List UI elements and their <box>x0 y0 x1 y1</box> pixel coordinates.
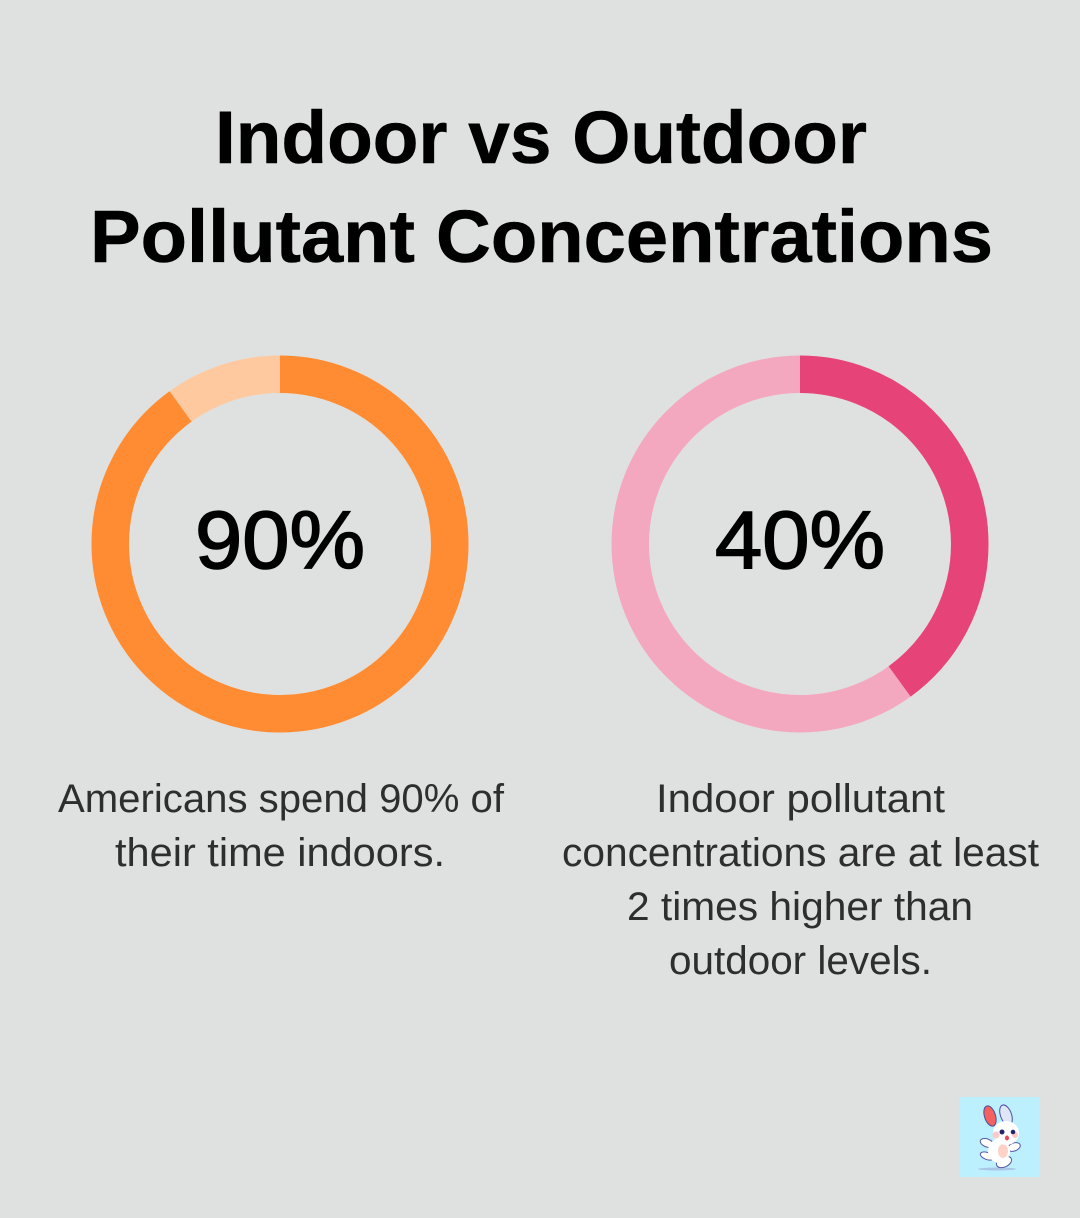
head <box>993 1121 1019 1145</box>
body <box>988 1139 1010 1163</box>
arms and legs <box>979 1137 1021 1170</box>
description: 40%: Indoor pollutant <box>656 777 945 821</box>
description: 90%: their time indoors. <box>115 831 445 875</box>
value: 90%: 90% <box>195 495 365 586</box>
title: Indoor vs Outdoor <box>215 96 867 179</box>
panel: 40% pollutant concentrations <box>562 374 1039 983</box>
donut chart: 90% <box>110 374 450 714</box>
icon: running rabbit logo <box>960 1097 1040 1177</box>
title: Pollutant Concentrations <box>90 195 993 278</box>
value: 40%: 40% <box>715 495 885 586</box>
description: 40% <box>562 777 1039 983</box>
description: 40%: concentrations are at least <box>562 831 1039 875</box>
description: 90% <box>58 777 505 875</box>
description: 40%: outdoor levels. <box>669 939 932 983</box>
right ear <box>997 1103 1015 1127</box>
description: 90%: Americans spend 90% of <box>58 777 505 821</box>
description: 40%: 2 times higher than <box>627 885 973 929</box>
panel: 90% time indoors <box>58 374 505 875</box>
left ear <box>982 1104 998 1128</box>
title <box>90 96 993 278</box>
donut chart: 40% <box>630 374 970 714</box>
